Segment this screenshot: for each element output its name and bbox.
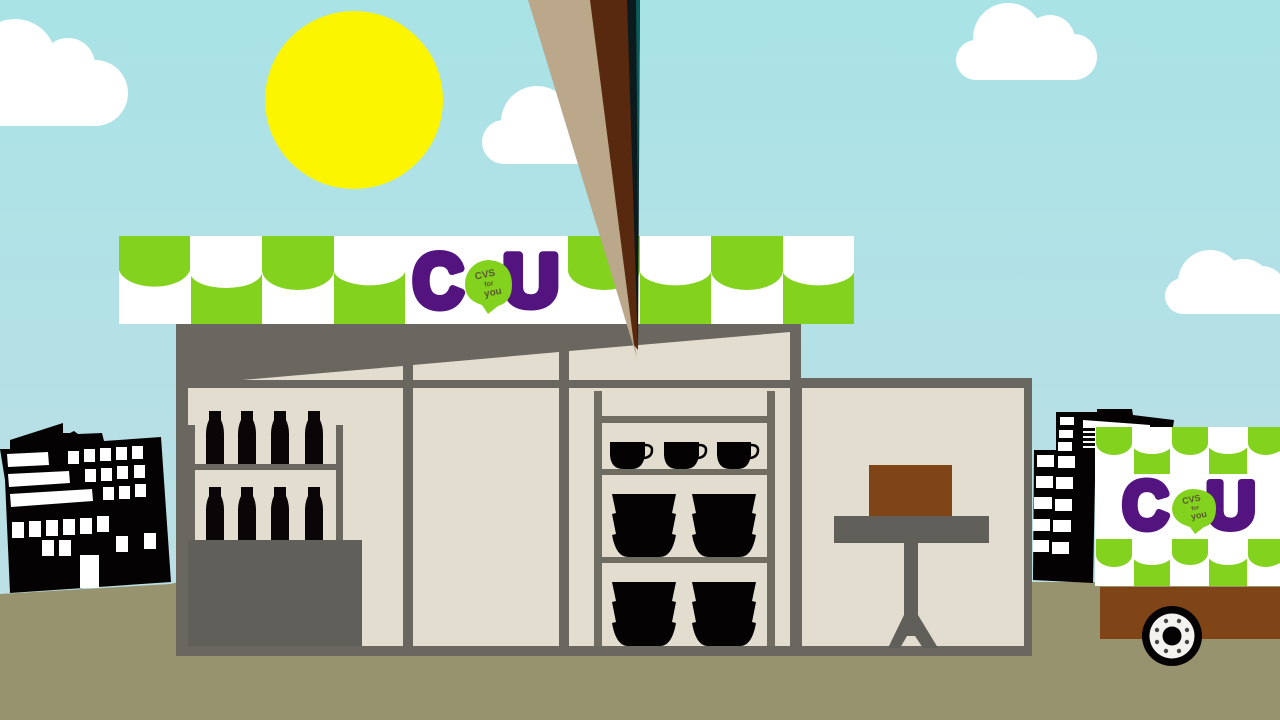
middle window panel xyxy=(413,388,559,646)
cup shelving unit xyxy=(594,391,775,646)
cloud: right xyxy=(1165,250,1280,314)
truck CU logo: for xyxy=(1191,505,1201,513)
right window panel xyxy=(569,388,790,646)
truck green scallops xyxy=(1096,427,1280,567)
cloud: top right xyxy=(956,3,1097,80)
truck bed xyxy=(1100,587,1280,639)
CU logo: for xyxy=(484,280,495,289)
left building xyxy=(0,423,171,593)
upper glass wedge xyxy=(242,332,790,380)
truck CU logo: C xyxy=(1122,467,1169,543)
light beam shards xyxy=(528,0,640,358)
cloud: behind beam xyxy=(482,86,590,164)
left window panel xyxy=(188,388,403,646)
awning xyxy=(119,236,854,324)
sun xyxy=(265,11,443,189)
ground xyxy=(0,582,1280,720)
right building windows xyxy=(1033,417,1150,554)
table with box xyxy=(834,465,989,648)
bowl stacks xyxy=(612,494,756,646)
truck sign panel xyxy=(1095,427,1280,586)
bottles xyxy=(206,411,323,540)
truck CU logo: U xyxy=(1206,469,1256,543)
truck lower green blocks xyxy=(1134,448,1247,586)
bottom row bottles xyxy=(206,487,323,540)
side wall panel xyxy=(802,388,1024,646)
cups xyxy=(610,442,758,469)
awning white scallops xyxy=(190,236,854,288)
truck CU logo: you xyxy=(1190,509,1208,522)
building windows xyxy=(7,446,156,588)
right building xyxy=(1033,409,1174,583)
truck CU logo: CVS xyxy=(1181,493,1201,506)
counter xyxy=(188,540,362,646)
top row bottles xyxy=(206,411,323,464)
store building xyxy=(176,324,1032,656)
bottle shelf bar xyxy=(192,464,338,470)
truck CU logo xyxy=(1122,467,1256,543)
CU logo xyxy=(413,240,559,324)
awning green scallops xyxy=(119,236,783,290)
CU logo: U xyxy=(503,240,559,322)
CU logo: C xyxy=(413,240,463,324)
truck wheel xyxy=(1142,606,1202,666)
store frame xyxy=(176,324,1032,656)
delivery truck xyxy=(1095,427,1280,666)
cloud: top left xyxy=(0,19,128,126)
CU logo: you xyxy=(483,286,503,300)
CU logo: CVS xyxy=(474,268,497,283)
awning lower green blocks xyxy=(191,270,854,324)
bottle shelf back xyxy=(195,425,336,540)
truck white scallops xyxy=(1132,427,1248,565)
